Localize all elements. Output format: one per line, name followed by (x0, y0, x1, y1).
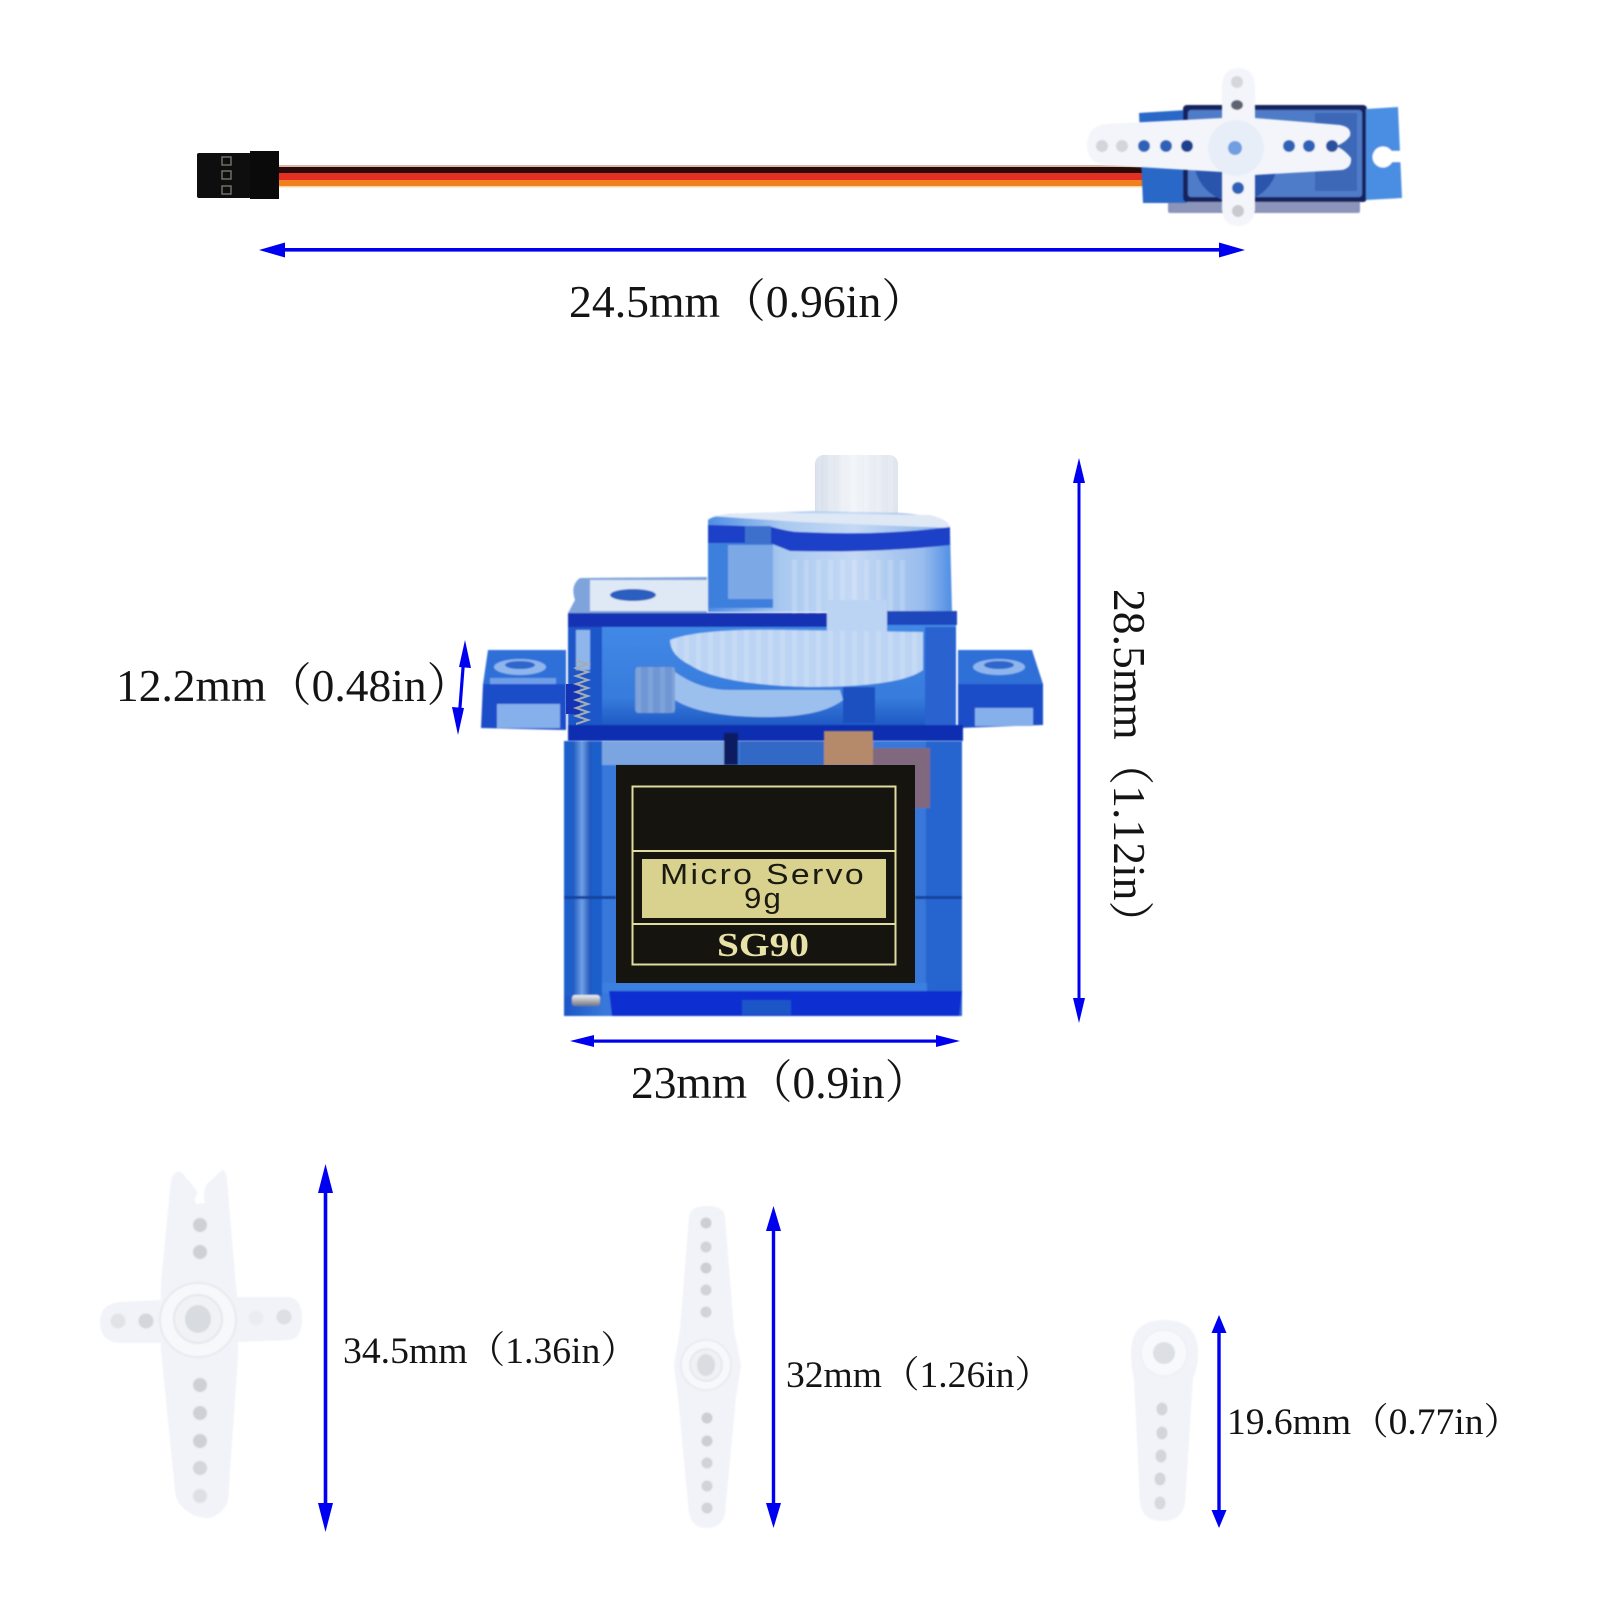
arrow: body width (570, 1035, 960, 1047)
label: Micro Servo 9g SG90 sticker: Micro Servo (660, 859, 866, 891)
icon: 3-pin connector (197, 151, 279, 199)
arrow: flange height (452, 640, 471, 735)
icon: double horn (674, 1206, 741, 1528)
text: double horn length: 32mm（1.26in） (786, 1355, 1052, 1396)
panel: cross horn (100, 1164, 638, 1532)
label: Micro Servo 9g SG90 sticker: 9g (744, 883, 783, 915)
arrow: body height (1073, 458, 1085, 1023)
text: cable length: 24.5mm（0.96in） (569, 276, 927, 327)
icon: single horn (1131, 1320, 1198, 1521)
icon: servo seen from above (1139, 105, 1404, 213)
text: cross horn length: 34.5mm（1.36in） (343, 1331, 638, 1372)
text: single horn length: 19.6mm（0.77in） (1227, 1402, 1521, 1443)
panel: double horn (674, 1206, 1052, 1528)
icon: corner screw (566, 660, 588, 724)
label: Micro Servo 9g SG90 sticker: SG90 (717, 927, 809, 964)
icon: three-colour wire (279, 165, 1149, 188)
icon: upper transparent gear housing (568, 511, 963, 741)
text: body height: 28.5mm（1.12in） (1104, 589, 1155, 946)
arrow: single horn length (1212, 1315, 1226, 1528)
text: body width: 23mm（0.9in） (631, 1057, 930, 1108)
panel: side view servo with cable (197, 68, 1404, 327)
label: Micro Servo 9g SG90 sticker (616, 765, 915, 983)
text: flange height: 12.2mm（0.48in） (116, 660, 472, 711)
icon: cross horn (100, 1170, 302, 1518)
panel: single horn (1131, 1315, 1521, 1528)
panel: front view SG90 servo (116, 455, 1155, 1108)
arrow: double horn length (766, 1206, 781, 1528)
icon: lower housing (564, 731, 962, 1016)
icon: servo tabs (481, 650, 1043, 730)
icon: output shaft (815, 455, 898, 533)
icon: cross horn on servo (1087, 68, 1351, 226)
arrow: cross horn length (318, 1164, 333, 1532)
arrow: cable length (259, 242, 1245, 258)
